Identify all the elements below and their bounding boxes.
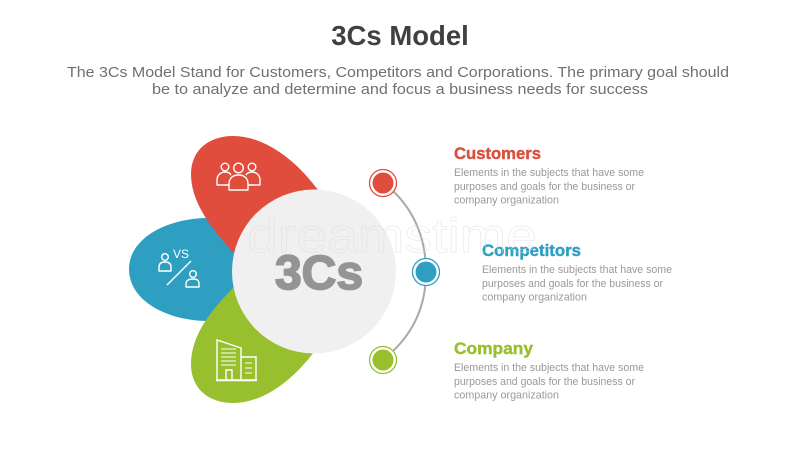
text block: competitors: Elements in the subjects that have some [482,264,672,276]
text block: company [454,340,644,402]
title: 3Cs Model [331,20,469,51]
node: company [370,346,396,374]
text block: company: purposes and goals for the business or [454,376,635,388]
petal: competitors [129,218,260,321]
heading: competitors: Competitors [482,242,581,260]
petal: company [191,288,314,403]
node: competitors [412,258,440,286]
heading: company: Company [454,340,534,358]
text block: company: Elements in the subjects that have some [454,362,644,374]
text block: competitors [482,242,672,304]
centre circle [232,190,396,354]
text block: customers: purposes and goals for the business or [454,181,635,193]
subtitle [67,64,729,98]
subtitle: The 3Cs Model Stand for Customers, Competitors and Corporations. The primary goal should [67,64,729,81]
diagram: petals and centre circle [129,136,396,403]
text block: competitors: purposes and goals for the business or [482,278,663,290]
text block: competitors: company organization [482,292,587,304]
watermark: dreamstime [247,210,537,263]
icon: company building [216,340,257,380]
petal: customers [191,136,318,252]
heading: customers: Customers [454,145,541,163]
icon: customers group [217,163,260,190]
icon: versus [159,247,199,287]
icon: versus: VS [173,247,189,261]
text block: company: company organization [454,390,559,402]
text block: customers: company organization [454,194,559,206]
text block: customers [454,145,644,206]
subtitle: be to analyze and determine and focus a business needs for success [152,81,648,98]
text block: customers: Elements in the subjects that have some [454,167,644,179]
centre label: 3Cs [275,247,363,300]
node: customers [370,170,396,196]
connector arc [393,191,426,351]
